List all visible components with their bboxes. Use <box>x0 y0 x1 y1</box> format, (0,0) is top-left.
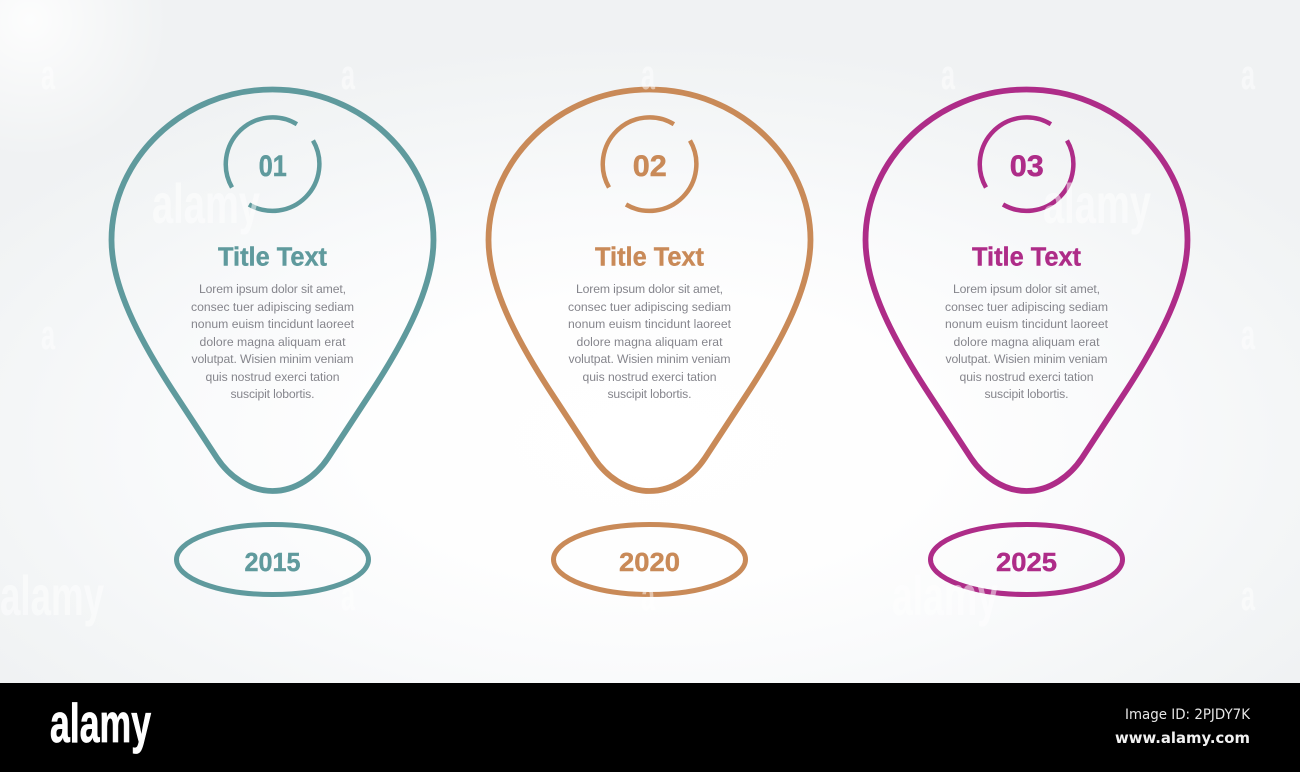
pin outline <box>488 90 810 491</box>
watermarks: a <box>941 51 955 98</box>
body text: suscipit lobortis. <box>984 387 1068 401</box>
year ellipse <box>176 524 368 594</box>
body text: nonum euism tincidunt laoreet <box>945 317 1109 331</box>
year ellipse <box>930 524 1122 594</box>
body text: Lorem ipsum dolor sit amet, <box>199 282 346 296</box>
footer bar <box>0 683 1300 772</box>
number ring <box>980 117 1073 211</box>
number: 01 <box>259 150 287 183</box>
body text <box>568 282 732 401</box>
pin outline <box>112 90 434 491</box>
watermarks: a <box>41 51 55 98</box>
watermarks: a <box>1241 572 1255 619</box>
year: 2015 <box>244 547 300 577</box>
body text: quis nostrud exerci tation <box>582 370 716 384</box>
year: 2025 <box>996 547 1057 577</box>
title: Title Text <box>218 244 327 272</box>
body text: dolore magna aliquam erat <box>200 335 346 349</box>
number: 03 <box>1010 150 1044 183</box>
number: 02 <box>633 150 667 183</box>
body text: nonum euism tincidunt laoreet <box>568 317 732 331</box>
watermarks: alamy <box>892 564 998 627</box>
watermarks <box>0 51 1255 627</box>
body text: Lorem ipsum dolor sit amet, <box>576 282 723 296</box>
watermarks: a <box>41 311 55 358</box>
footer logo: alamy <box>50 692 151 754</box>
watermarks: a <box>341 51 355 98</box>
panel: 2015 teal pin <box>112 90 434 594</box>
watermarks: alamy <box>0 564 104 627</box>
body text: consec tuer adipiscing sediam <box>191 300 354 314</box>
pin outline <box>866 90 1188 491</box>
watermarks: alamy <box>152 172 260 235</box>
title: Title Text <box>595 244 704 272</box>
body text: volutpat. Wisien minim veniam <box>192 352 354 366</box>
body text: consec tuer adipiscing sediam <box>568 300 731 314</box>
image id: Image ID: 2PJDY7K <box>1125 707 1250 723</box>
watermarks: alamy <box>1043 172 1151 235</box>
panel: 2020 orange pin <box>488 90 810 594</box>
body text: volutpat. Wisien minim veniam <box>946 352 1108 366</box>
body text: dolore magna aliquam erat <box>576 335 723 349</box>
body text <box>945 282 1109 401</box>
panel: 2025 magenta pin <box>866 90 1188 594</box>
year: 2020 <box>619 547 680 577</box>
number ring <box>603 117 696 211</box>
body text <box>191 282 355 401</box>
body text: dolore magna aliquam erat <box>954 335 1100 349</box>
watermarks: a <box>1241 311 1255 358</box>
title: Title Text <box>972 244 1081 272</box>
watermarks: a <box>641 572 655 619</box>
body text: quis nostrud exerci tation <box>960 370 1094 384</box>
body text: nonum euism tincidunt laoreet <box>191 317 355 331</box>
watermarks: a <box>341 572 355 619</box>
watermarks: a <box>1241 51 1255 98</box>
body text: consec tuer adipiscing sediam <box>945 300 1108 314</box>
website: www.alamy.com <box>1115 729 1250 747</box>
body text: volutpat. Wisien minim veniam <box>568 352 730 366</box>
body text: quis nostrud exerci tation <box>206 370 340 384</box>
body text: suscipit lobortis. <box>608 387 692 401</box>
number ring <box>226 117 319 211</box>
year ellipse <box>554 524 746 594</box>
watermarks: a <box>641 51 655 98</box>
body text: suscipit lobortis. <box>230 387 314 401</box>
body text: Lorem ipsum dolor sit amet, <box>953 282 1100 296</box>
